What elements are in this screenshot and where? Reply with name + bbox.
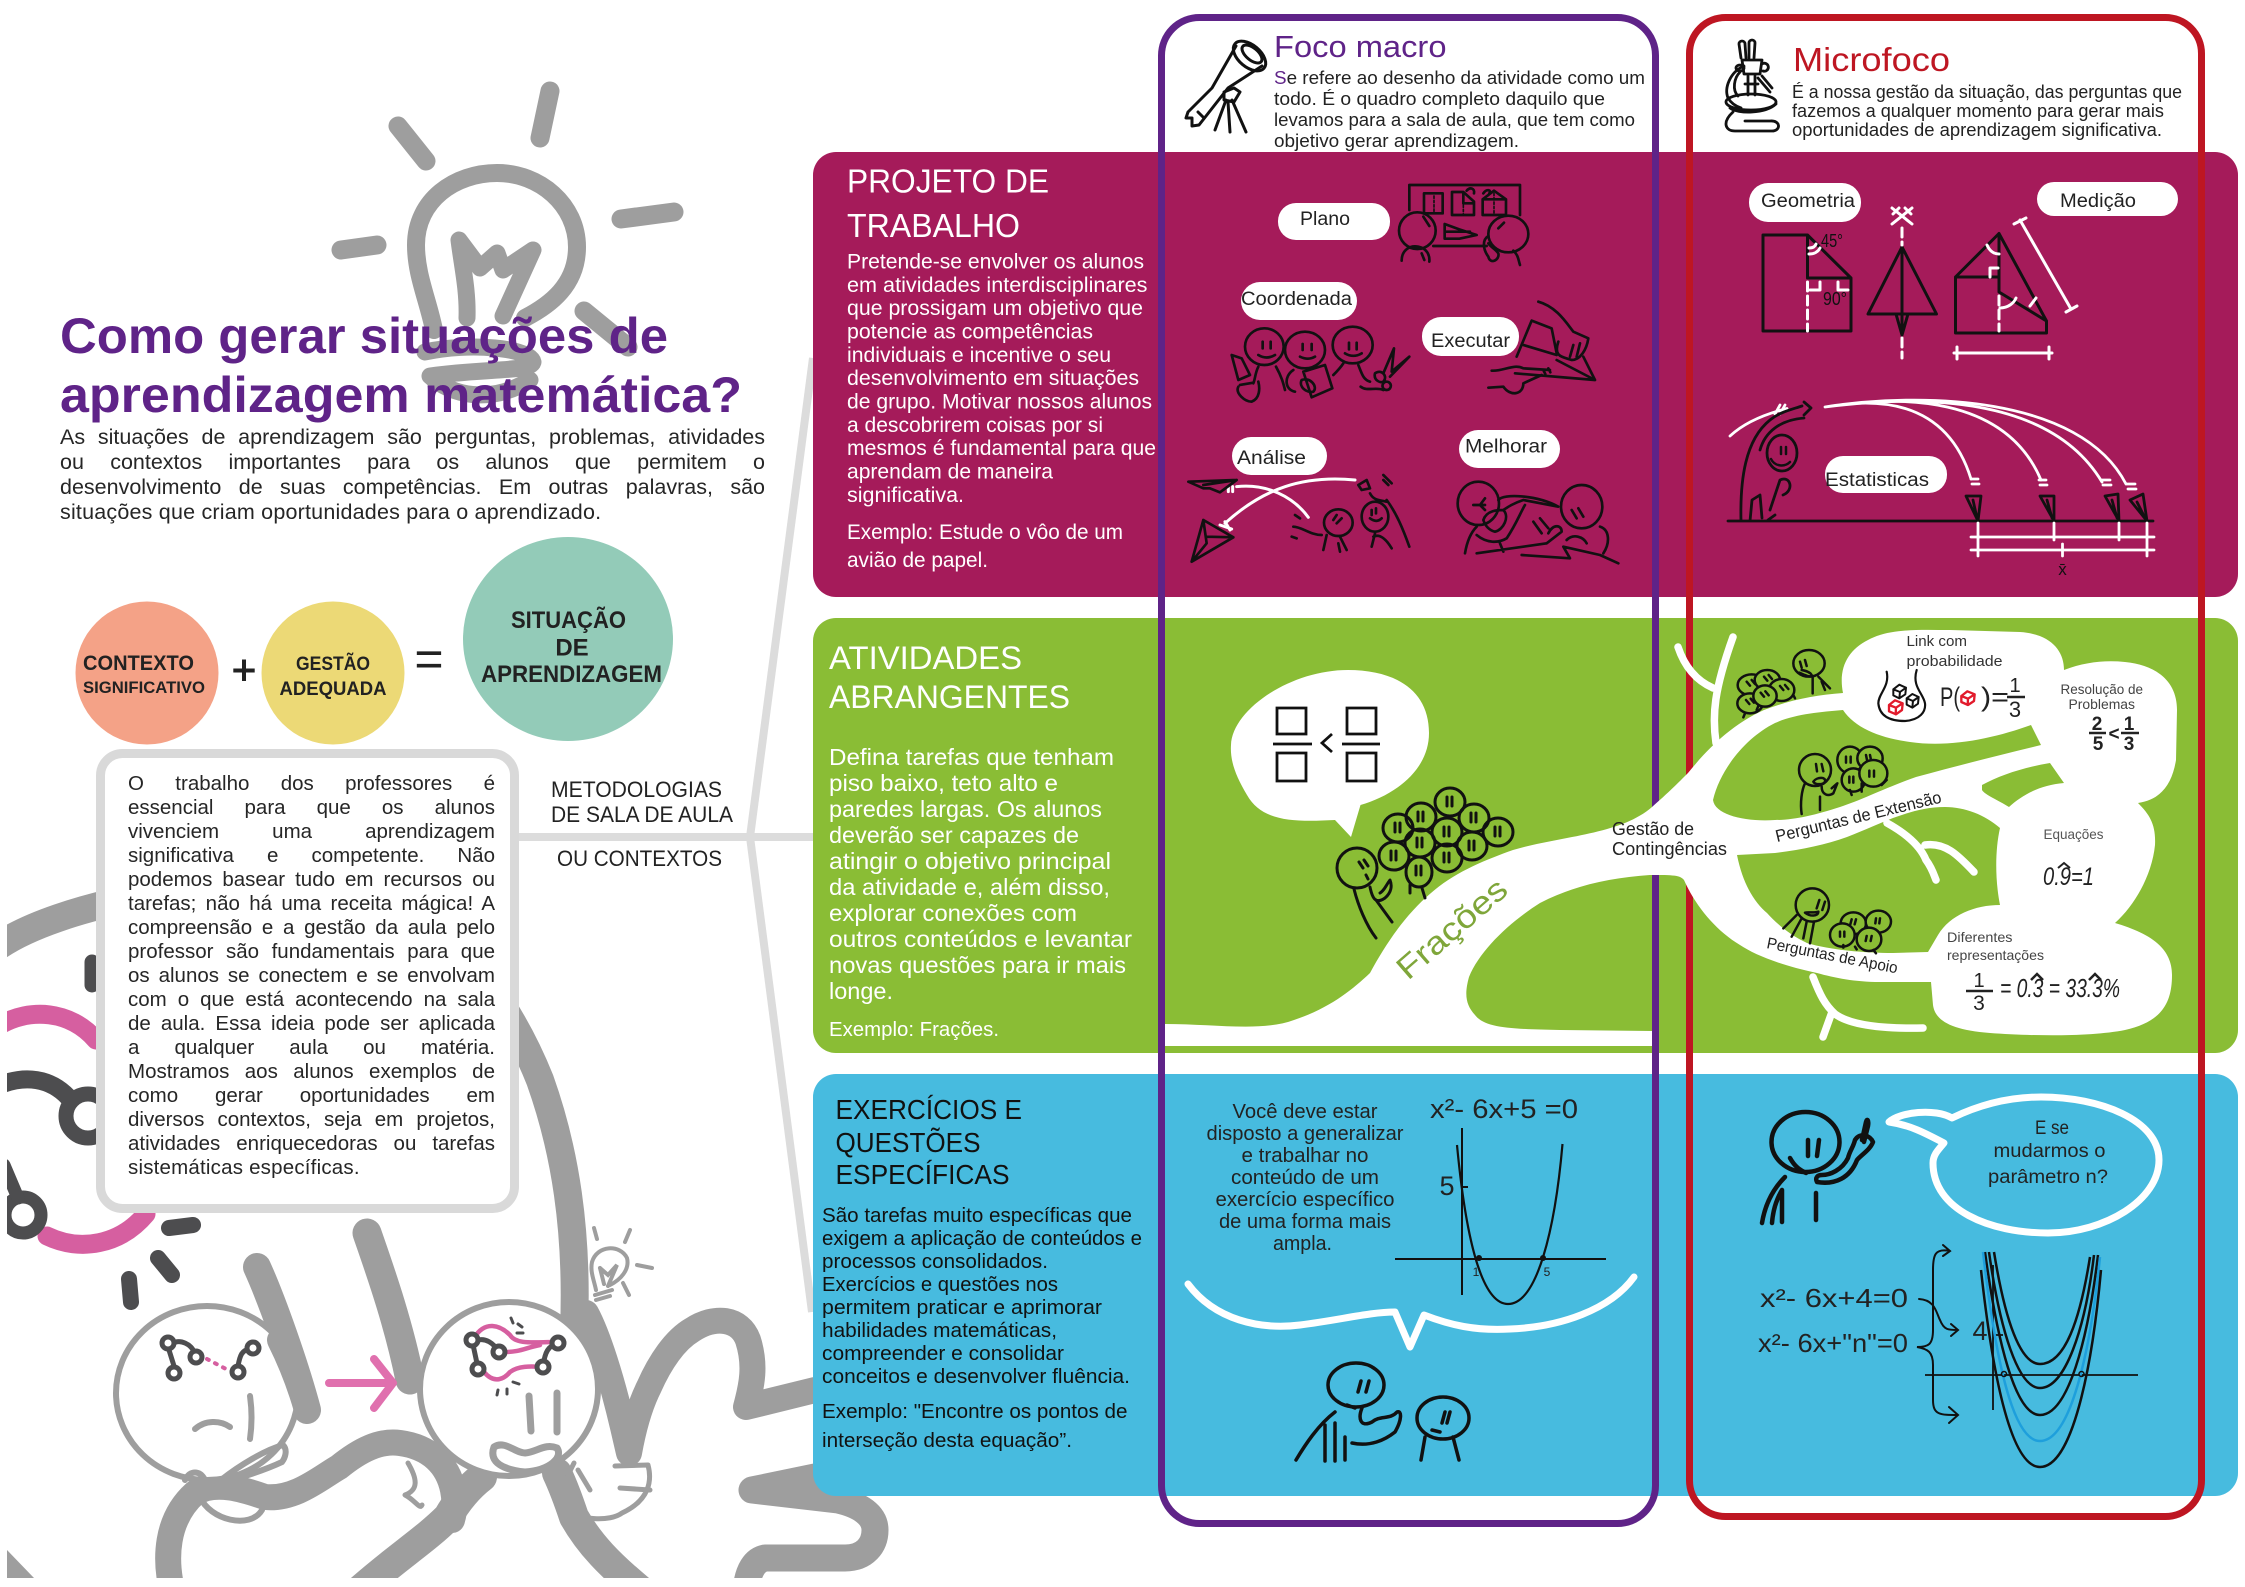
text: exercícios example xyxy=(822,1400,1128,1452)
doodle: teacher and student xyxy=(1296,1363,1469,1461)
tree diagram: branching white road xyxy=(1165,630,2177,1046)
icon: large lightbulb xyxy=(341,91,674,395)
illustration: happy head with connected nodes xyxy=(405,1302,650,1519)
chart: parabola with roots 1 and 5: 5 xyxy=(1439,1171,1455,1201)
heading: exercícios e questões específicas: EXERCÍCIOS E xyxy=(836,1094,1022,1125)
text: o trabalho dos professores: podemos basear tudo em recursos ou xyxy=(128,868,495,891)
text: foco macro description: Se refere ao desenho da atividade como um xyxy=(1274,67,1645,88)
cloud: resolução de problemas: 2 xyxy=(2092,714,2102,735)
text: projeto de trabalho description: potencie as competências xyxy=(847,320,1093,344)
label pill: coordenada: Coordenada xyxy=(1241,289,1352,310)
cloud: equações: Equações xyxy=(2044,826,2104,842)
doodle: three students with tools xyxy=(1232,327,1409,402)
illustration: giant head outline and curved arms xyxy=(0,880,875,1587)
text: atividades description: Defina tarefas que tenham xyxy=(829,744,1114,770)
doodle: folded paper with angles xyxy=(1763,231,1851,331)
text: atividades description: longe. xyxy=(829,978,893,1004)
doodle: hands folding paper xyxy=(1488,302,1595,393)
text: projeto de trabalho description xyxy=(847,250,1156,507)
panel: exercícios e questões background xyxy=(813,1074,2238,1496)
text: foco macro description: objetivo gerar aprendizagem. xyxy=(1274,130,1519,151)
cloud: diferentes representações: representações xyxy=(1947,947,2044,963)
label pill: coordenada xyxy=(1241,282,1357,320)
text: projeto de trabalho description: desenvolvimento em situações xyxy=(847,367,1139,390)
text: o trabalho dos professores: compreensão e a gestão da aula pelo xyxy=(128,916,495,939)
text: projeto de trabalho description: mesmos é fundamental para que xyxy=(847,437,1156,460)
branch label: gestão de contingências: Gestão de xyxy=(1612,819,1694,839)
label pill: análise: Análise xyxy=(1237,448,1306,469)
chart: parabola with roots 1 and 5: 1 xyxy=(1473,1265,1480,1279)
label: metodologias de sala de aula ou contextos xyxy=(551,777,733,871)
circle: gestão adequada xyxy=(262,602,404,744)
heading: exercícios e questões específicas: ESPECÍFICAS xyxy=(836,1159,1010,1190)
heading: foco macro: Foco macro xyxy=(1274,29,1446,64)
equations: parameter family: x²- 6x+"n"=0 xyxy=(1758,1328,1908,1358)
circle: situação de aprendizagem: DE xyxy=(555,634,589,662)
text: o trabalho dos professores: essencial para que os alunos xyxy=(128,796,495,819)
speech bubble: fraction comparison xyxy=(1231,670,1429,837)
text: exercícios description: conceitos e desenvolver fluência. xyxy=(822,1365,1130,1388)
cloud: equações xyxy=(2043,826,2104,891)
heading: projeto de trabalho xyxy=(847,162,1049,244)
cloud: equações: 0.9=1 xyxy=(2043,863,2094,891)
cloud: diferentes representações xyxy=(1947,929,2120,1015)
branch label: frações: Frações xyxy=(1389,871,1514,986)
arrows: brace to parabolas xyxy=(1917,1245,1958,1423)
text: exercícios description: habilidades matemáticas, xyxy=(822,1319,1057,1342)
equation: contexto + gestão = situação de aprendizagem xyxy=(76,537,673,744)
text: projeto de trabalho example: avião de papel. xyxy=(847,549,988,572)
column frame: foco macro xyxy=(1162,18,1656,1524)
equals sign: = xyxy=(414,631,444,687)
text: generalizar o exercício: de uma forma mais xyxy=(1219,1211,1391,1233)
text: generalizar o exercício: Você deve estar xyxy=(1232,1101,1378,1123)
text: microfoco description: É a nossa gestão da situação, das perguntas que xyxy=(1792,81,2182,102)
text: atividades description: piso baixo, teto alto e xyxy=(829,770,1058,796)
text: introductory paragraph: desenvolvimento de suas competências. Em outras palavras, são xyxy=(60,475,765,499)
arrow: pink from confused to connected head xyxy=(329,1359,393,1408)
circle: contexto significativo xyxy=(76,602,218,744)
text: microfoco description xyxy=(1792,81,2182,140)
heading: microfoco: Microfoco xyxy=(1793,41,1950,78)
heading: atividades abrangentes xyxy=(829,640,1070,715)
doodle: students launching paper planes xyxy=(1188,475,1409,562)
label pill: executar: Executar xyxy=(1431,331,1511,352)
text: introductory paragraph: ou contextos importantes para os alunos que permitem o xyxy=(60,450,765,474)
circle: situação de aprendizagem: APRENDIZAGEM xyxy=(481,661,662,688)
text: foco macro description xyxy=(1274,67,1645,151)
text: atividades description: da atividade e, além disso, xyxy=(829,874,1110,900)
cloud: resolução de problemas: Resolução de xyxy=(2060,682,2143,697)
label pill: medição: Medição xyxy=(2060,191,2136,212)
cloud: link com probabilidade: 1 xyxy=(2009,675,2021,697)
heading: projeto de trabalho: PROJETO DE xyxy=(847,162,1049,200)
doodle: unfolded paper with measurements xyxy=(1954,218,2077,359)
cloud: resolução de problemas: 3 xyxy=(2124,734,2134,755)
branch label: gestão de contingências xyxy=(1612,819,1727,859)
chart: parabola with roots 1 and 5: 5 xyxy=(1544,1265,1551,1279)
text: o trabalho dos professores xyxy=(128,772,496,1179)
background illustration: grey lightbulb and thinking figures xyxy=(0,91,875,1587)
label: metodologias de sala de aula ou contextos: DE SALA DE AULA xyxy=(551,802,733,827)
macro focus: generalize the exercise xyxy=(1188,1094,1634,1461)
label pill: geometria xyxy=(1749,183,1861,222)
text: atividades description: explorar conexões com xyxy=(829,900,1077,926)
text: o trabalho dos professores: diversos contextos, seja em projetos, xyxy=(128,1108,495,1131)
text: microfoco description: fazemos a qualquer momento para gerar mais xyxy=(1792,100,2164,121)
doodle: student with raised finger xyxy=(1762,1112,1873,1223)
cloud: diferentes representações: Diferentes xyxy=(1947,929,2012,945)
cloud: link com probabilidade: probabilidade xyxy=(1906,653,2002,670)
connector lines: methodologies to panels xyxy=(519,358,813,1312)
text: o trabalho dos professores: de aula. Essa ideia pode ser aplicada xyxy=(128,1012,495,1035)
text: exercícios description: Exercícios e questões nos xyxy=(822,1273,1058,1296)
text: projeto de trabalho description: aprendam de maneira xyxy=(847,460,1053,484)
text: o trabalho dos professores: a qualquer aula ou matéria. xyxy=(128,1036,495,1059)
label pill: estatisticas: Estatisticas xyxy=(1825,470,1929,491)
title: aprendizagem matemática? xyxy=(60,367,742,423)
title: Como gerar situações de xyxy=(60,308,668,364)
text: generalizar o exercício: e trabalhar no xyxy=(1242,1145,1368,1167)
circle: gestão adequada: ADEQUADA xyxy=(280,679,387,700)
text: exercícios description: permitem praticar e aprimorar xyxy=(822,1296,1102,1319)
circle: situação de aprendizagem: SITUAÇÃO xyxy=(511,606,626,634)
cloud: link com probabilidade xyxy=(1878,633,2025,722)
text: generalizar o exercício: disposto a generalizar xyxy=(1206,1123,1404,1145)
cloud: diferentes representações: 3 xyxy=(1973,992,1985,1015)
text: projeto de trabalho description: Pretende-se envolver os alunos xyxy=(847,250,1144,274)
branch label: perguntas de apoio: Perguntas de Apoio xyxy=(1765,935,1899,977)
text: atividades description: atingir o objetivo principal xyxy=(829,848,1111,874)
label pill: geometria: Geometria xyxy=(1761,191,1855,212)
text: exercícios description: São tarefas muito específicas que xyxy=(822,1204,1132,1227)
cloud: resolução de problemas: Problemas xyxy=(2068,697,2135,712)
text box frame: o trabalho dos professores xyxy=(100,754,514,1208)
panel: projeto de trabalho background xyxy=(813,152,2238,597)
icon: telescope xyxy=(1186,35,1271,132)
header: microfoco xyxy=(1726,40,2182,140)
text: atividades description: novas questões para ir mais xyxy=(829,952,1126,978)
label: metodologias de sala de aula ou contextos: METODOLOGIAS xyxy=(551,777,722,802)
column frame: microfoco xyxy=(1690,18,2202,1516)
text: projeto de trabalho description: individuais e incentive o seu xyxy=(847,344,1111,367)
macro focus: fraction comparison xyxy=(1231,670,1513,938)
equations: parameter family: x²- 6x+4=0 xyxy=(1760,1283,1908,1313)
doodle: paper plane with symmetry axis xyxy=(1868,208,1936,358)
text: o trabalho dos professores: Mostramos aos alunos exemplos de xyxy=(128,1060,495,1083)
text: generalizar o exercício: exercício específico xyxy=(1216,1189,1394,1211)
text: o trabalho dos professores: significativa e competente. Não xyxy=(128,844,495,867)
icon: jar with dice xyxy=(1878,670,1975,721)
text: o trabalho dos professores: os alunos se conectem e se envolvam xyxy=(128,964,495,987)
text: exercícios description: compreender e consolidar xyxy=(822,1342,1064,1365)
header: foco macro xyxy=(1186,29,1645,151)
text: exercícios example: interseção desta equação”. xyxy=(822,1429,1072,1452)
text: projeto de trabalho example xyxy=(847,521,1123,572)
text: introductory paragraph: As situações de aprendizagem são perguntas, problemas, atividades xyxy=(60,425,765,449)
circle: contexto significativo: SIGNIFICATIVO xyxy=(83,678,205,697)
panel: atividades abrangentes background xyxy=(813,618,2238,1053)
doodle: students in upper branch xyxy=(1737,650,1830,717)
text: projeto de trabalho description: de grupo. Motivar nossos alunos xyxy=(847,390,1152,414)
label pill: análise xyxy=(1232,437,1327,475)
heading: exercícios e questões específicas: QUESTÕES xyxy=(836,1127,980,1158)
heading: atividades abrangentes: ATIVIDADES xyxy=(829,640,1022,676)
text: introductory paragraph: situações que criam oportunidades para o aprendizado. xyxy=(60,500,601,524)
speech bubble: e se mudarmos o parâmetro n? xyxy=(1889,1097,2159,1233)
text: atividades description xyxy=(829,744,1132,1004)
text: generalizar o exercício: ampla. xyxy=(1273,1233,1332,1255)
panel text: projeto de trabalho xyxy=(847,162,1156,572)
heading: projeto de trabalho: TRABALHO xyxy=(847,207,1020,244)
label pill: executar xyxy=(1422,317,1519,356)
text: atividades description: paredes largas. Os alunos xyxy=(829,796,1102,822)
text: o trabalho dos professores: sistemáticas específicas. xyxy=(128,1156,360,1179)
circle: gestão adequada: GESTÃO xyxy=(296,653,370,675)
text: o trabalho dos professores: O trabalho dos professores é xyxy=(128,772,495,795)
speech bubble line xyxy=(1188,1277,1634,1347)
label pill: medição xyxy=(2037,182,2178,216)
cloud: diferentes representações: 1 xyxy=(1973,970,1985,992)
speech bubble: e se mudarmos o parâmetro n?: parâmetro n? xyxy=(1988,1167,2108,1188)
doodle: students in extension branch xyxy=(1799,747,1887,814)
doodle: two students adjusting a plane xyxy=(1458,482,1618,563)
plus sign: + xyxy=(232,646,256,693)
cloud: link com probabilidade: Link com xyxy=(1906,633,1967,650)
cloud: resolução de problemas: < xyxy=(2108,724,2120,745)
chart: parabola with roots 1 and 5 xyxy=(1395,1128,1606,1304)
cloud: link com probabilidade: )= xyxy=(1981,682,2009,712)
text: generalizar o exercício: conteúdo de um xyxy=(1231,1167,1379,1189)
text: o trabalho dos professores: professor são fundamentais para que xyxy=(128,940,495,963)
cloud: link com probabilidade: 3 xyxy=(2009,697,2021,722)
doodle: folded paper with angles: 90° xyxy=(1823,289,1847,309)
tree shape: trunk, branches and clouds xyxy=(1165,630,2177,1046)
text: atividades description: outros conteúdos e levantar xyxy=(829,926,1132,952)
text: atividades description: deverão ser capazes de xyxy=(829,822,1079,848)
doodle: two students at a board xyxy=(1399,185,1528,265)
panel text: exercícios e questões específicas xyxy=(822,1094,1142,1452)
label: metodologias de sala de aula ou contextos: OU CONTEXTOS xyxy=(557,846,722,871)
text: o trabalho dos professores: tarefas; não há uma receita mágica! A xyxy=(128,892,495,915)
illustration: pink and dark network strokes xyxy=(0,962,193,1302)
illustration: triangle corner xyxy=(7,1550,34,1578)
text: exercícios description: processos consolidados. xyxy=(822,1250,1048,1273)
illustration: sad head with disconnected nodes xyxy=(116,1306,307,1521)
label pill: estatisticas xyxy=(1825,456,1947,493)
label pill: plano: Plano xyxy=(1300,209,1350,230)
equation: x²-6x+5=0: x²- 6x+5 =0 xyxy=(1430,1094,1578,1124)
doodle: folded paper with angles: 45° xyxy=(1821,231,1843,251)
cloud: resolução de problemas: 5 xyxy=(2093,734,2104,755)
green gaps between branches xyxy=(1713,710,2064,953)
micro focus: change the parameter xyxy=(1758,1097,2159,1467)
text: projeto de trabalho description: que prossigam um objetivo que xyxy=(847,297,1143,320)
text: o trabalho dos professores: vivenciem uma aprendizagem xyxy=(128,820,495,843)
chart: plane flight distances with mean: x̄ xyxy=(2058,560,2067,579)
cloud: diferentes representações: = 0.3 = 33.3% xyxy=(2000,973,2120,1003)
doodle: students in support branch xyxy=(1783,888,1891,953)
title xyxy=(60,308,742,423)
doodle: crowd of students xyxy=(1379,788,1513,898)
text: introductory paragraph xyxy=(60,425,765,524)
text: exercícios description xyxy=(822,1204,1142,1388)
label pill: melhorar xyxy=(1459,430,1560,468)
icon: microscope xyxy=(1726,40,1779,131)
panel text: atividades abrangentes xyxy=(829,640,1132,1041)
text: projeto de trabalho description: em atividades interdisciplinares xyxy=(847,274,1148,297)
text: atividades example: Exemplo: Frações. xyxy=(829,1019,999,1041)
text: generalizar o exercício xyxy=(1206,1101,1404,1255)
thin side branches xyxy=(1678,637,1974,1037)
label pill: plano xyxy=(1278,203,1390,240)
text: exercícios description: exigem a aplicação de conteúdos e xyxy=(822,1227,1142,1250)
heading: atividades abrangentes: ABRANGENTES xyxy=(829,679,1070,715)
text: o trabalho dos professores: como gerar oportunidades em xyxy=(128,1084,495,1107)
icon: small grey lightbulb xyxy=(591,1228,652,1300)
doodle: teacher pointing xyxy=(1337,848,1392,938)
text: projeto de trabalho description: a descobrirem coisas por si xyxy=(847,414,1103,437)
cloud: link com probabilidade: P( xyxy=(1940,682,1960,712)
circle: situação de aprendizagem xyxy=(463,537,673,741)
chart: plane flight distances with mean xyxy=(1728,400,2154,579)
text: foco macro description: levamos para a sala de aula, que tem como xyxy=(1274,109,1635,130)
cloud: resolução de problemas xyxy=(2060,682,2143,755)
branch label: gestão de contingências: Contingências xyxy=(1612,839,1727,859)
text: projeto de trabalho example: Exemplo: Estude o vôo de um xyxy=(847,521,1123,544)
chart: family of parabolas xyxy=(1925,1252,2138,1467)
cloud: resolução de problemas: 1 xyxy=(2124,714,2135,735)
text: foco macro description: todo. É o quadro completo daquilo que xyxy=(1274,88,1605,109)
branch label: perguntas de extensão: Perguntas de Extensão xyxy=(1773,788,1943,846)
speech bubble: e se mudarmos o parâmetro n?: mudarmos o xyxy=(1994,1141,2106,1162)
label pill: melhorar: Melhorar xyxy=(1465,436,1548,458)
chart label: 4: 4 xyxy=(1972,1316,1988,1346)
text: microfoco description: oportunidades de aprendizagem significativa. xyxy=(1792,119,2162,140)
text: exercícios example: Exemplo: "Encontre os pontos de xyxy=(822,1400,1128,1423)
circle: contexto significativo: CONTEXTO xyxy=(83,652,194,675)
equations: parameter family xyxy=(1758,1283,1908,1358)
heading: exercícios e questões específicas xyxy=(836,1094,1022,1190)
text: o trabalho dos professores: com o que está acontecendo na sala xyxy=(128,988,495,1011)
text: projeto de trabalho description: significativa. xyxy=(847,484,964,507)
speech bubble: e se mudarmos o parâmetro n?: E se xyxy=(2035,1118,2069,1139)
macro focus: project stages xyxy=(1188,185,1618,563)
text: o trabalho dos professores: atividades enriquecedoras ou tarefas xyxy=(128,1132,495,1155)
micro focus: mathematics in the project xyxy=(1728,182,2178,579)
